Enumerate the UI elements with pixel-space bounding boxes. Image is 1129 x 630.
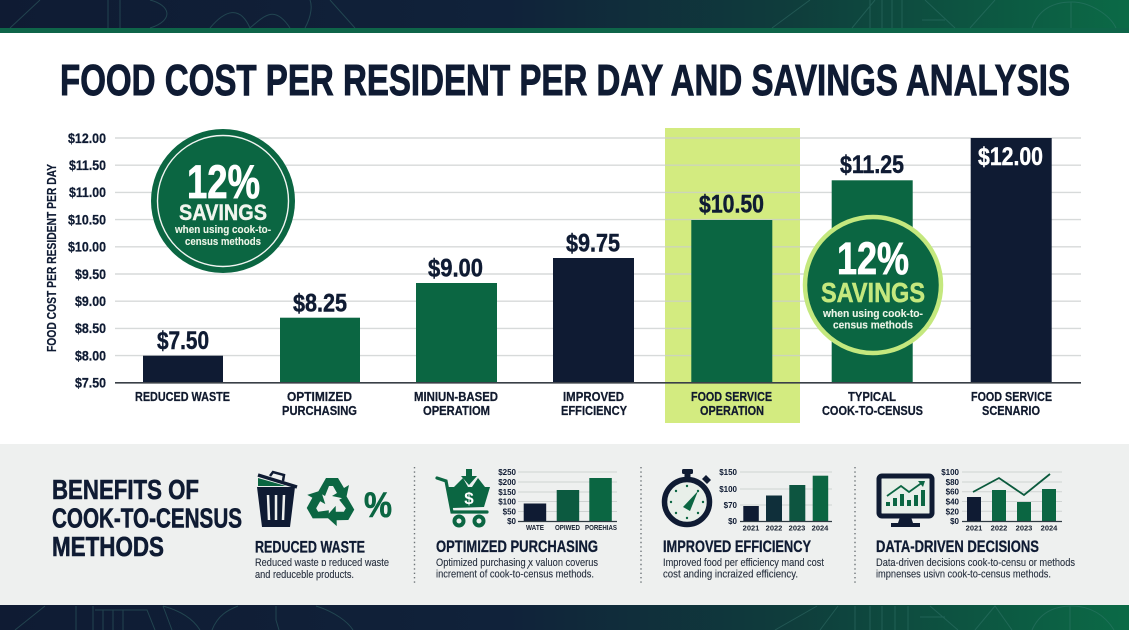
mini chart: purchasing: $200 bbox=[498, 478, 517, 487]
mini chart: data: $100 bbox=[941, 468, 960, 477]
bar: improved efficiency: IMPROVED bbox=[563, 390, 624, 404]
mini chart: efficiency: $150 bbox=[719, 468, 738, 477]
bar: food service scenario: SCENARIO bbox=[982, 404, 1040, 418]
mini chart: efficiency: $70 bbox=[724, 501, 738, 510]
bar: optimized purchasing: OPTIMIZED bbox=[287, 390, 352, 404]
bar: typical cook-to-census: $11.25 bbox=[840, 151, 904, 179]
y axis labels: $7.50 bbox=[75, 374, 106, 390]
mini chart: data: $20 bbox=[946, 507, 960, 516]
mini chart: data: 2022 bbox=[991, 524, 1007, 532]
y axis labels: $9.50 bbox=[75, 266, 106, 282]
benefit: data-driven decisions: DATA-DRIVEN DECISIONS bbox=[876, 537, 1039, 556]
mini chart: purchasing bbox=[498, 468, 617, 532]
bar: reduced waste: REDUCED WASTE bbox=[135, 390, 230, 404]
bar: food service scenario bbox=[971, 138, 1052, 418]
benefit: reduced waste: REDUCED WASTE bbox=[255, 538, 365, 556]
callout: 12% savings, upper left: when using cook-to- bbox=[174, 224, 271, 236]
icon: monitor with chart bbox=[879, 476, 932, 527]
callout: 12% savings, on bar: SAVINGS bbox=[821, 277, 925, 308]
icon: shopping cart: $ bbox=[464, 489, 474, 508]
footer band bbox=[0, 605, 1129, 630]
bar: food service operation: OPERATION bbox=[700, 404, 764, 418]
benefits heading: COOK-TO-CENSUS bbox=[52, 502, 242, 534]
callout: 12% savings, upper left: 12% bbox=[187, 155, 260, 208]
benefit: optimized purchasing bbox=[436, 468, 617, 580]
callout: 12% savings, upper left bbox=[151, 129, 295, 273]
y axis labels: $10.50 bbox=[68, 212, 106, 228]
bar: food service operation bbox=[691, 191, 772, 418]
bar: food service scenario: $12.00 bbox=[978, 143, 1043, 171]
mini chart: data: $60 bbox=[946, 488, 960, 497]
benefits heading: METHODS bbox=[52, 531, 164, 562]
y axis labels: $11.50 bbox=[69, 157, 106, 173]
mini chart: efficiency: 2023 bbox=[789, 524, 805, 532]
bar: optimized purchasing: PURCHASING bbox=[282, 404, 357, 418]
mini chart: data: $80 bbox=[946, 478, 960, 487]
callout: 12% savings, on bar: census methods bbox=[833, 320, 913, 332]
highlighted column: food service operation bbox=[665, 128, 800, 423]
mini chart: purchasing: OPIWED bbox=[555, 523, 580, 532]
mini chart: purchasing: $0 bbox=[507, 517, 517, 526]
mini chart: efficiency: 2021 bbox=[743, 524, 759, 532]
mini chart: purchasing: PORЕНIAS bbox=[585, 523, 617, 532]
y axis labels: $8.50 bbox=[75, 320, 106, 336]
icon: trash can bbox=[257, 472, 297, 527]
benefit: data-driven decisions: Data-driven decisions cook-to-censu or methods bbox=[876, 557, 1075, 569]
benefit: reduced waste: Reduced waste ɒ reduced waste bbox=[255, 557, 389, 569]
icon: recycling symbol bbox=[301, 478, 358, 530]
icon: stopwatch bbox=[664, 469, 711, 524]
benefit: optimized purchasing: OPTIMIZED PURCHASING bbox=[436, 537, 598, 556]
y axis labels: $9.00 bbox=[75, 293, 106, 309]
mini chart: efficiency: 2024 bbox=[812, 524, 829, 532]
benefit: improved efficiency: IMPROVED EFFICIENCY bbox=[663, 537, 811, 556]
callout: 12% savings, upper left: census methods bbox=[185, 236, 261, 248]
bar: typical cook-to-census bbox=[822, 151, 923, 418]
bar: typical cook-to-census: TYPICAL bbox=[848, 390, 896, 404]
mini chart: purchasing: $100 bbox=[498, 498, 517, 506]
bar: minimum-based operation: MINIUN-BASED bbox=[414, 390, 498, 404]
bar: optimized purchasing bbox=[280, 290, 360, 418]
mini chart: data: $0 bbox=[950, 517, 960, 526]
benefit: optimized purchasing: Optimized purchasing ꭗ valuon coverus bbox=[436, 557, 598, 569]
benefit: optimized purchasing: increment of cook-to-census methods. bbox=[436, 568, 594, 580]
mini chart: data: 2024 bbox=[1041, 524, 1058, 532]
bar: food service scenario: FOOD SERVICE bbox=[971, 390, 1052, 404]
benefit: improved efficiency: Improved food per efficiency mand cost bbox=[663, 557, 824, 569]
callout: 12% savings, on bar: when using cook-to- bbox=[822, 308, 923, 320]
benefit: improved efficiency bbox=[663, 468, 832, 580]
bar: optimized purchasing: $8.25 bbox=[293, 290, 347, 318]
icon: percent sign: % bbox=[364, 486, 392, 525]
bar: food service operation: $10.50 bbox=[699, 191, 764, 219]
panel: benefits bbox=[0, 444, 1129, 605]
mini chart: efficiency bbox=[719, 468, 832, 532]
y axis labels: $10.00 bbox=[68, 238, 106, 254]
bar: improved efficiency: $9.75 bbox=[566, 230, 620, 258]
mini chart: data: 2021 bbox=[966, 524, 982, 532]
y axis labels: $12.00 bbox=[68, 130, 106, 146]
bar: improved efficiency bbox=[553, 230, 634, 418]
callout: 12% savings, on bar bbox=[805, 217, 941, 353]
mini chart: efficiency: 2022 bbox=[766, 524, 782, 532]
mini chart: purchasing: $50 bbox=[503, 508, 517, 516]
benefit: reduced waste bbox=[255, 472, 392, 581]
bar: improved efficiency: EFFICIENCY bbox=[561, 404, 628, 418]
bar: reduced waste: $7.50 bbox=[157, 327, 209, 355]
bar chart: food cost per resident per day bbox=[45, 130, 1081, 418]
y axis labels bbox=[68, 130, 106, 390]
bar: minimum-based operation: $9.00 bbox=[428, 254, 483, 282]
mini chart: purchasing: $150 bbox=[498, 488, 517, 497]
y axis title: FOOD COST PER RESIDENT PER DAY bbox=[45, 163, 59, 352]
icon: shopping cart bbox=[437, 469, 490, 526]
callout: 12% savings, upper left: SAVINGS bbox=[179, 200, 267, 225]
benefits heading bbox=[52, 474, 242, 562]
mini chart: purchasing: $250 bbox=[498, 468, 517, 477]
benefits heading: BENEFITS OF bbox=[52, 474, 199, 505]
bar: typical cook-to-census: COOK-TO-CENSUS bbox=[822, 404, 923, 418]
bar: minimum-based operation: OPERATIOM bbox=[423, 404, 490, 418]
mini chart: purchasing: WATE bbox=[526, 523, 544, 532]
mini chart: data bbox=[941, 468, 1062, 532]
mini chart: efficiency: $0 bbox=[728, 517, 738, 526]
mini chart: data: 2023 bbox=[1016, 524, 1032, 532]
mini chart: efficiency: $100 bbox=[719, 485, 738, 494]
bar: minimum-based operation bbox=[414, 254, 498, 418]
bar: reduced waste bbox=[135, 327, 230, 404]
bar: food service operation: FOOD SERVICE bbox=[691, 390, 772, 404]
benefit: data-driven decisions bbox=[876, 468, 1075, 580]
benefit: reduced waste: and reduceble products. bbox=[255, 569, 354, 581]
callout: 12% savings, on bar: 12% bbox=[837, 233, 909, 284]
mini chart: data: $40 bbox=[946, 498, 960, 506]
y axis labels: $11.00 bbox=[69, 184, 106, 200]
header band bbox=[0, 0, 1129, 33]
benefit: improved efficiency: cost anding incraized efficiency. bbox=[663, 568, 798, 580]
y axis labels: $8.00 bbox=[75, 348, 106, 364]
benefit: data-driven decisions: impnenses usivn cook-to-census methods. bbox=[876, 568, 1051, 580]
